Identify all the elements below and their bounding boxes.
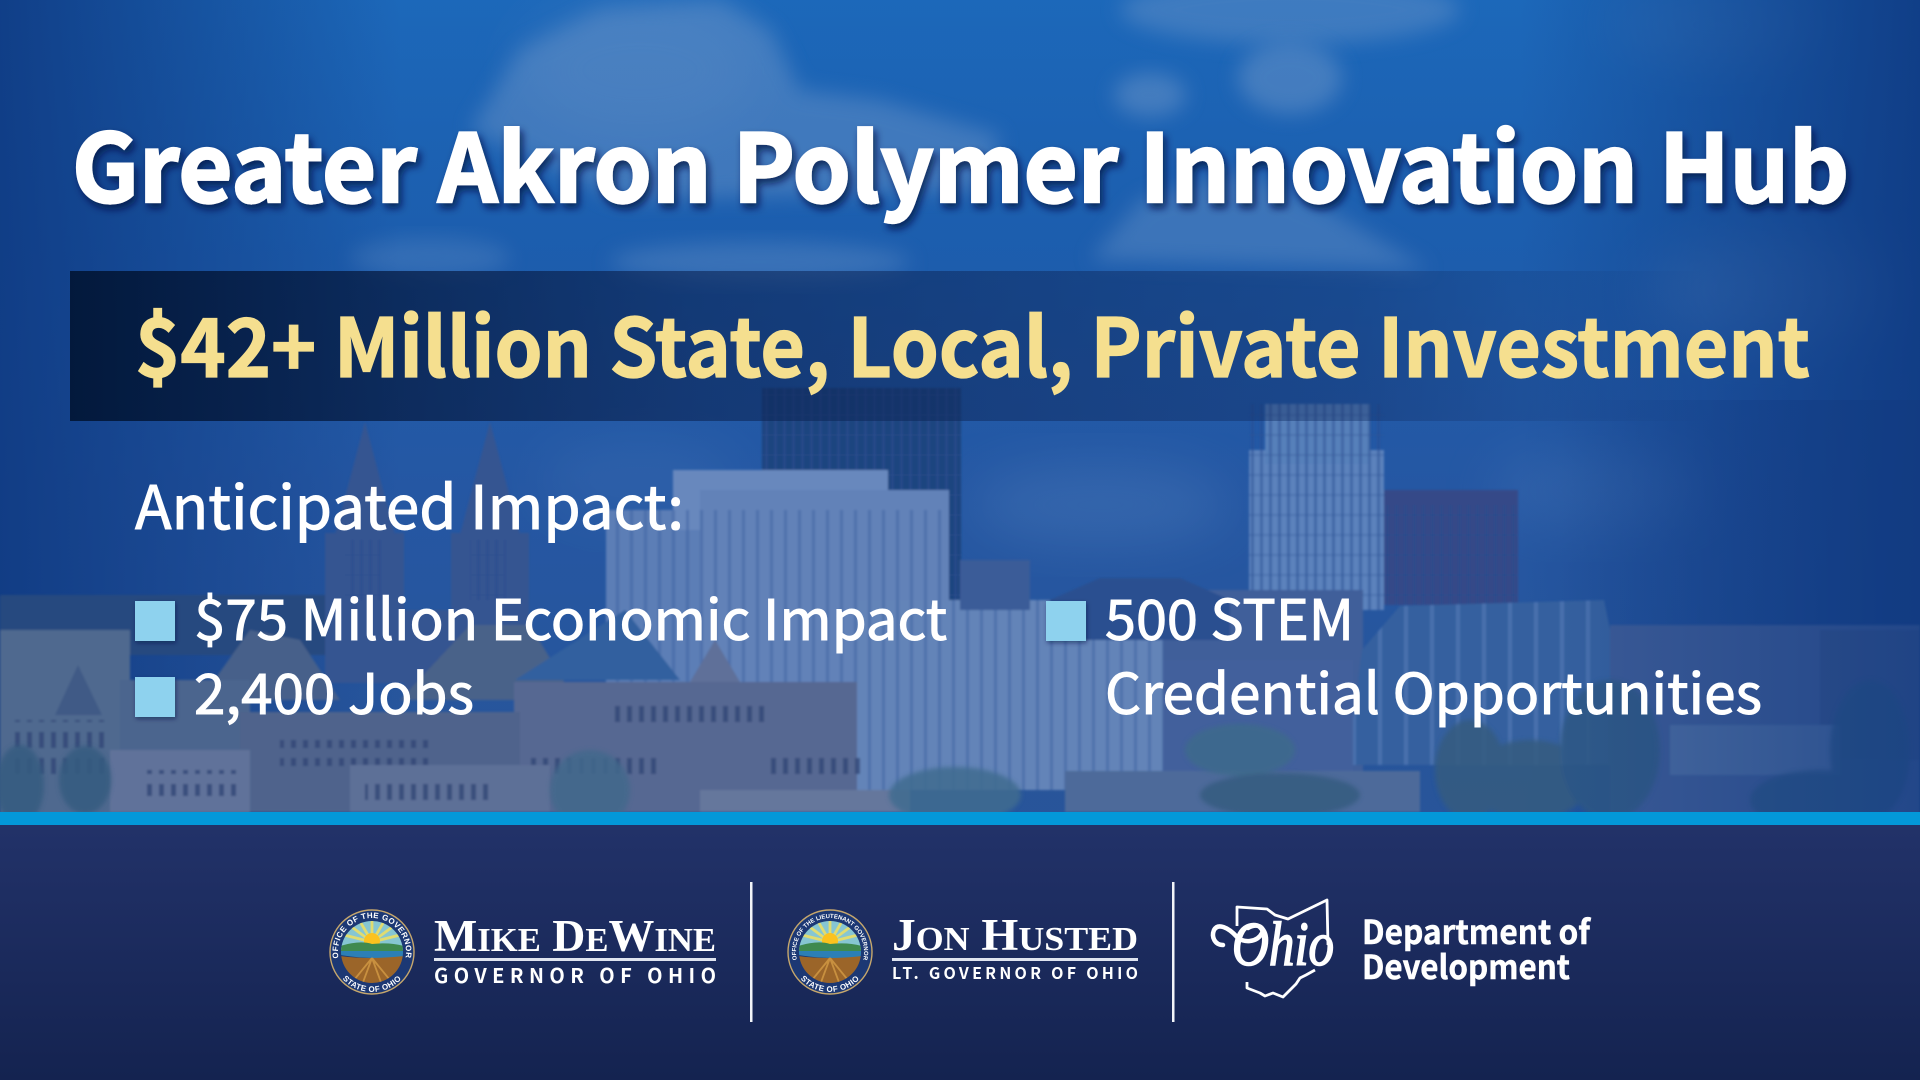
low roof [1065, 771, 1420, 812]
Ohio logo [1213, 900, 1334, 997]
bullet 2: 2,400 Jobs [194, 650, 474, 731]
title: Greater Akron Polymer Innovation Hub [72, 94, 1849, 230]
investment banner [70, 271, 1850, 421]
lt governor seal [787, 909, 873, 995]
accent stripe [0, 812, 1920, 825]
distant treeline [0, 595, 330, 655]
trees [0, 680, 1842, 812]
blue roof [515, 610, 680, 680]
name: Mike DeWine: MIKE DEWINE [434, 911, 716, 961]
divider 2 [1172, 882, 1174, 1022]
brick complex [514, 640, 860, 812]
lt governor seal: OFFICE OF THE LIEUTENANT GOVERNOR [792, 914, 868, 960]
governor seal: OFFICE OF THE GOVERNOR [332, 912, 412, 958]
first national tower [1249, 404, 1384, 610]
governor seal: STATE OF OHIO [343, 976, 400, 992]
bullet 3 [1046, 576, 1762, 731]
footer band [0, 825, 1920, 1080]
lt governor seal: STATE OF OHIO [801, 976, 858, 992]
name: Mike DeWine [434, 911, 716, 989]
right low buildings [1610, 625, 1920, 815]
impact list [135, 576, 1762, 731]
name: Mike DeWine: GOVERNOR OF OHIO [434, 960, 716, 989]
banner headline: $42+ Million State, Local, Private Investment [135, 284, 1810, 401]
governor seal [329, 909, 415, 995]
bullet 3: 500 STEM [1105, 576, 1354, 657]
name: Jon Husted [892, 910, 1138, 984]
left buildings [0, 630, 250, 820]
name: Jon Husted: LT. GOVERNOR OF OHIO [892, 960, 1138, 984]
clouds [350, 0, 1910, 545]
Ohio logo: Ohio [1232, 911, 1334, 979]
lower right buildings [1163, 590, 1363, 790]
department name [1362, 906, 1592, 989]
sky vignette [0, 0, 334, 757]
name: Jon Husted: JON HUSTED [892, 910, 1138, 960]
department name: Development [1362, 941, 1570, 989]
divider 1 [750, 882, 752, 1022]
glass roof hall [1353, 600, 1610, 766]
department name: Department of [1362, 906, 1592, 954]
skyline [0, 388, 1920, 820]
bullet 1: $75 Million Economic Impact [194, 576, 947, 657]
mid block [857, 560, 1163, 790]
bullet 3: Credential Opportunities [1105, 650, 1762, 731]
dark tower [762, 388, 961, 608]
white hospital block [606, 470, 949, 710]
brown tower [1384, 490, 1518, 605]
anticipated impact heading: Anticipated Impact: [135, 460, 684, 547]
church [200, 422, 575, 700]
background photo: sky and skyline [0, 0, 1920, 830]
